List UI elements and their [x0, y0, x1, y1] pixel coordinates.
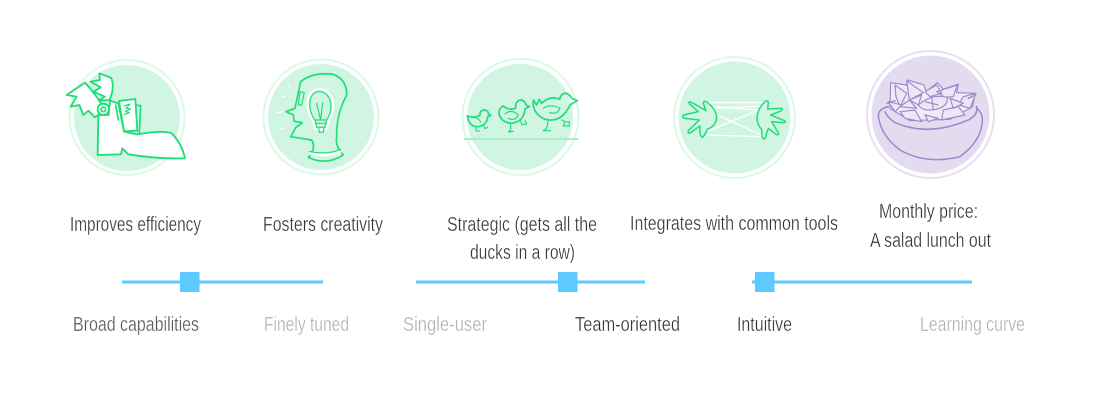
- feature label: integrates: Integrates with common tools: [630, 213, 838, 235]
- price label: Monthly price:: [879, 201, 978, 223]
- price label: [870, 201, 991, 252]
- icon: head with light bulb: [264, 60, 378, 174]
- feature label: fosters creativity: Fosters creativity: [263, 214, 383, 236]
- slider label: broad capabilities: Broad capabilities: [73, 314, 199, 336]
- slider label: single-user: Single-user: [403, 314, 487, 336]
- slider label: team-oriented: Team-oriented: [575, 314, 680, 336]
- slider label: finely tuned: Finely tuned: [264, 314, 349, 336]
- slider label: intuitive: Intuitive: [737, 314, 792, 336]
- icon: winged boot: [67, 60, 185, 175]
- icon: salad bowl: [867, 51, 994, 178]
- feature label: strategic: [447, 214, 597, 264]
- slider: intuitive vs learning curve: [752, 272, 972, 292]
- price label: A salad lunch out: [870, 230, 991, 252]
- slider: single-user vs team-oriented: [416, 272, 645, 292]
- feature label: strategic: Strategic (gets all the: [447, 214, 597, 236]
- feature label: strategic: ducks in a row): [470, 242, 575, 264]
- slider: broad capabilities vs finely tuned: [122, 272, 323, 292]
- slider label: learning curve: Learning curve: [920, 314, 1025, 336]
- feature label: improves efficiency: Improves efficiency: [70, 214, 201, 236]
- icon: ducks in a row: [462, 59, 578, 175]
- icon: hands connecting: [674, 57, 795, 178]
